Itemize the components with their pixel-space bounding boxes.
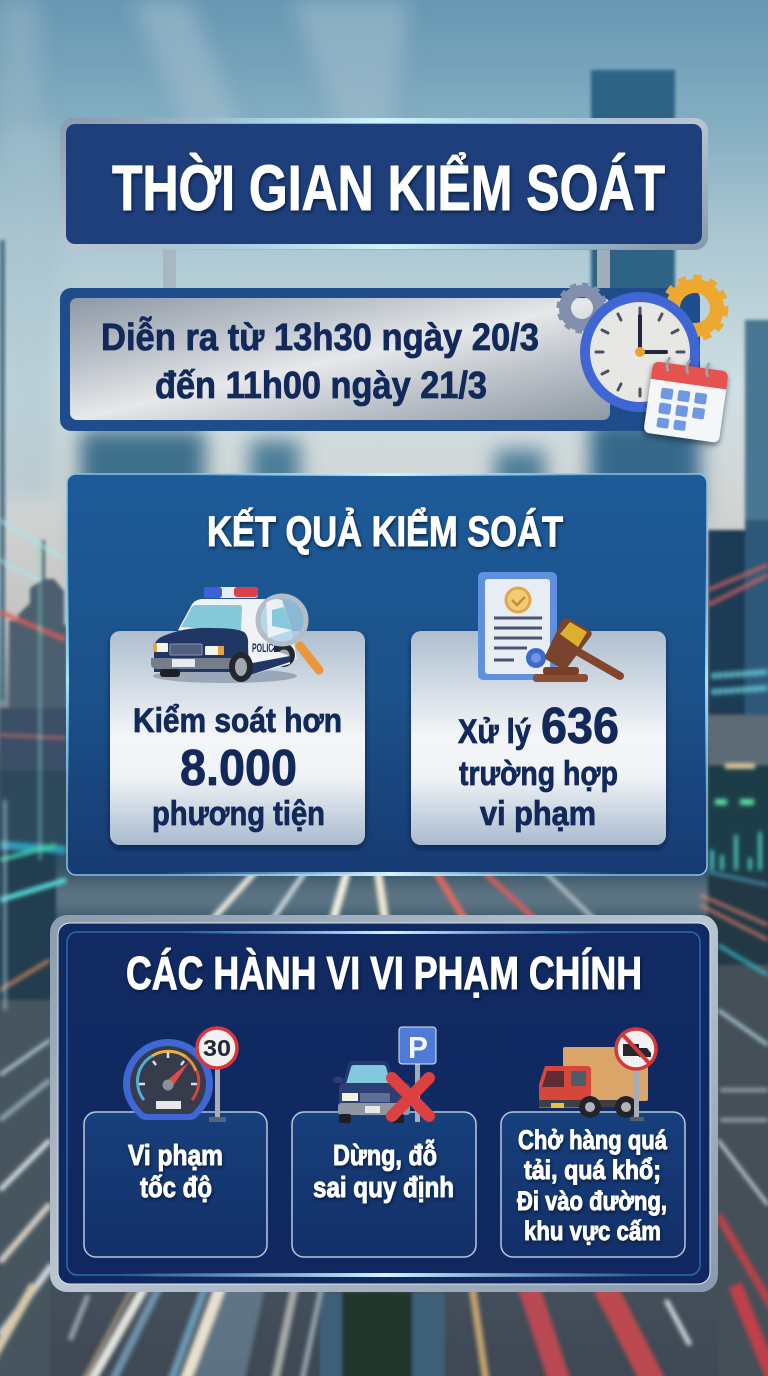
title sign bbox=[60, 118, 708, 250]
results heading: KẾT QUẢ KIỂM SOÁT bbox=[207, 507, 563, 556]
icon: clock, gears and calendar bbox=[560, 279, 729, 443]
card: violations handled: 636 bbox=[541, 697, 619, 754]
card: overload and restricted areas: tải, quá khổ; bbox=[524, 1155, 661, 1185]
card: violations handled bbox=[411, 631, 666, 845]
card: overload and restricted areas bbox=[501, 1112, 685, 1257]
icon: parked car, P sign and red cross bbox=[333, 1027, 436, 1123]
icon: delivery truck and no-truck sign bbox=[539, 1029, 656, 1121]
card: vehicles checked: 8.000 bbox=[180, 739, 297, 796]
card: illegal parking: sai quy định bbox=[313, 1172, 454, 1204]
time period text: đến 11h00 ngày 21/3 bbox=[155, 365, 487, 407]
card: violations handled: Xử lý bbox=[458, 713, 531, 751]
card: illegal parking bbox=[292, 1112, 476, 1257]
panel: time period bbox=[60, 288, 700, 431]
icon: police car with magnifier bbox=[151, 587, 319, 683]
card: violations handled: trường hợp bbox=[459, 755, 618, 793]
card: overload and restricted areas: khu vực cấm bbox=[524, 1216, 661, 1246]
card: vehicles checked bbox=[110, 631, 365, 845]
card: speeding: Vi phạm bbox=[128, 1140, 223, 1172]
icon: police car with magnifier: POLICE bbox=[252, 641, 278, 655]
card: overload and restricted areas: Đi vào đường, bbox=[517, 1186, 667, 1216]
card: violations handled: vi phạm bbox=[480, 795, 596, 833]
panel: main violations bbox=[50, 915, 718, 1292]
time period text: Diễn ra từ 13h30 ngày 20/3 bbox=[101, 315, 539, 359]
card: overload and restricted areas: Chở hàng quá bbox=[518, 1125, 668, 1155]
icon: speedometer and 30 sign: 30 bbox=[203, 1035, 231, 1061]
time period text bbox=[101, 315, 539, 407]
sign posts bbox=[163, 248, 610, 292]
card: illegal parking: Dừng, đỗ bbox=[333, 1138, 437, 1172]
card: vehicles checked: phương tiện bbox=[152, 795, 325, 833]
icon: parked car, P sign and red cross: P bbox=[408, 1030, 428, 1065]
icon: document and gavel bbox=[478, 572, 620, 682]
icon: speedometer and 30 sign bbox=[123, 1028, 237, 1122]
card: vehicles checked: Kiểm soát hơn bbox=[133, 702, 342, 740]
card: speeding: tốc độ bbox=[140, 1172, 212, 1204]
panel: control results bbox=[66, 473, 708, 876]
card: speeding bbox=[84, 1112, 267, 1257]
